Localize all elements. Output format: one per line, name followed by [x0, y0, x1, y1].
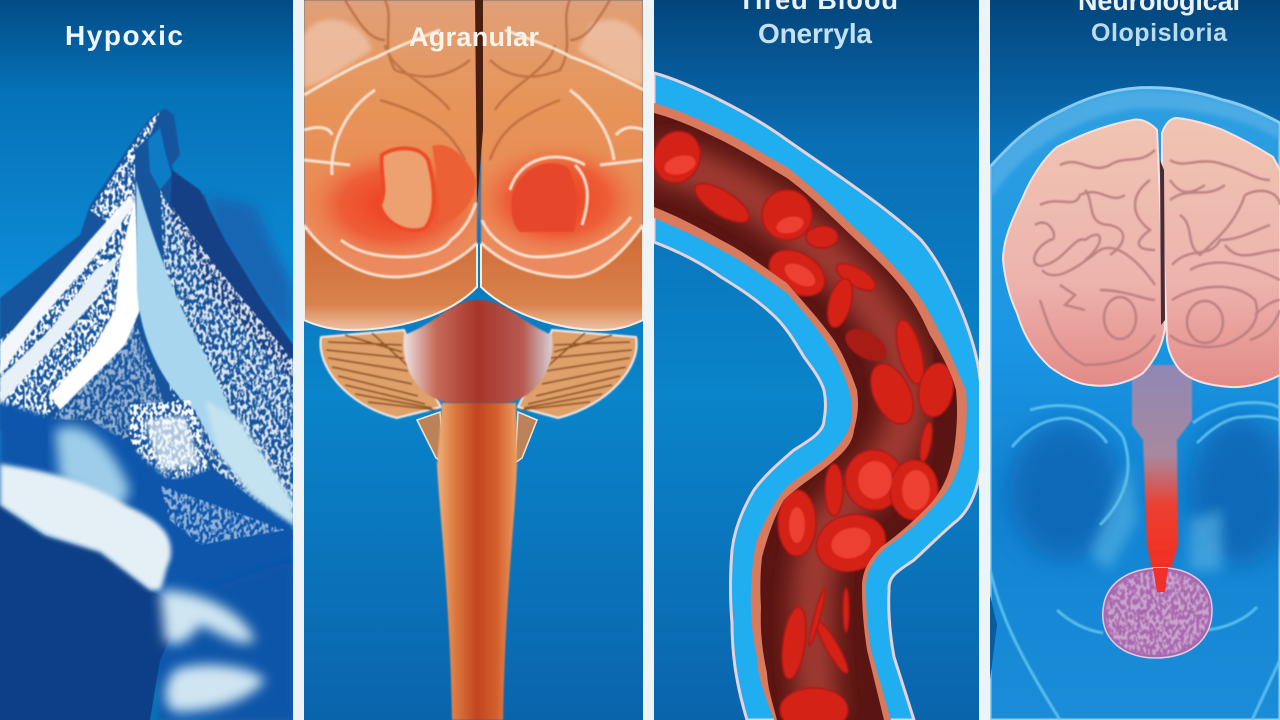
outer face dark edge: [990, 595, 997, 680]
speckled mid band: [160, 485, 285, 545]
panel: brain and head: [990, 0, 1280, 720]
left ridge highlight: [90, 112, 160, 225]
blood lumen: [646, 100, 979, 720]
bottom right shade: [292, 570, 293, 600]
panel: hypoxic mountain: [0, 0, 293, 720]
white snowfield lower centre: [130, 400, 210, 480]
near dark slope: [0, 505, 183, 720]
panel: blood vessel: [646, 0, 983, 720]
title: Agranular: Agranular: [409, 22, 539, 52]
face lines: [990, 403, 1280, 720]
red blood cells: [646, 125, 957, 720]
red lobe beside fold: [432, 145, 476, 225]
subtitle: Anemia: Onerryla: [758, 18, 872, 49]
central fissure: [475, 0, 483, 205]
right red dome: [511, 163, 577, 232]
lighter bright rim on head: [990, 90, 1280, 200]
snow band left: [0, 195, 137, 420]
brain right lobe: [1162, 118, 1280, 387]
upper brain lobes: [304, 0, 477, 277]
translucent head: [990, 88, 1280, 720]
lower cloud wisps: [160, 590, 265, 712]
cerebellum side fans: [320, 330, 637, 418]
title: Hypoxic: Hypoxic: [65, 20, 183, 51]
stem side ears: [417, 412, 537, 463]
subtitle: Hypoxia: Olopisloria: [1091, 19, 1228, 47]
brain left lobe: [1003, 119, 1165, 386]
white ridge strips: [0, 195, 135, 375]
speckled lower left face: [50, 320, 170, 440]
nose wings: [1090, 460, 1222, 570]
speckled right snow: [160, 190, 293, 530]
pale top gyri: [304, 20, 643, 88]
pituitary gland: [1103, 568, 1212, 658]
vessel outer wall: [654, 73, 983, 720]
cloud: [0, 464, 171, 590]
brain stalk: [1132, 365, 1192, 592]
vessel inner wall: [654, 103, 967, 720]
red kidney fold: [380, 148, 434, 230]
pons bulb: [404, 300, 552, 403]
central brain fissure: [1160, 160, 1165, 325]
eye and cheek shadows: [1010, 415, 1280, 565]
cloud haze: [55, 426, 130, 510]
dark upper ridge rocks: [170, 170, 293, 380]
brain gyri: [1034, 150, 1280, 365]
blue snow slide: [136, 180, 293, 525]
hook sky notch: [148, 128, 172, 190]
deep blue mid band: [0, 402, 293, 720]
mountain body: [0, 108, 293, 560]
mountain background haze: [205, 195, 293, 340]
dark top folds: [345, 0, 610, 160]
panel: brainstem: [303, 0, 644, 720]
pale slide lower: [205, 400, 293, 530]
lower brain lobes: [304, 228, 477, 330]
spinal stem: [437, 403, 517, 720]
gyri highlights: [304, 30, 644, 277]
hot regions: [316, 155, 482, 254]
